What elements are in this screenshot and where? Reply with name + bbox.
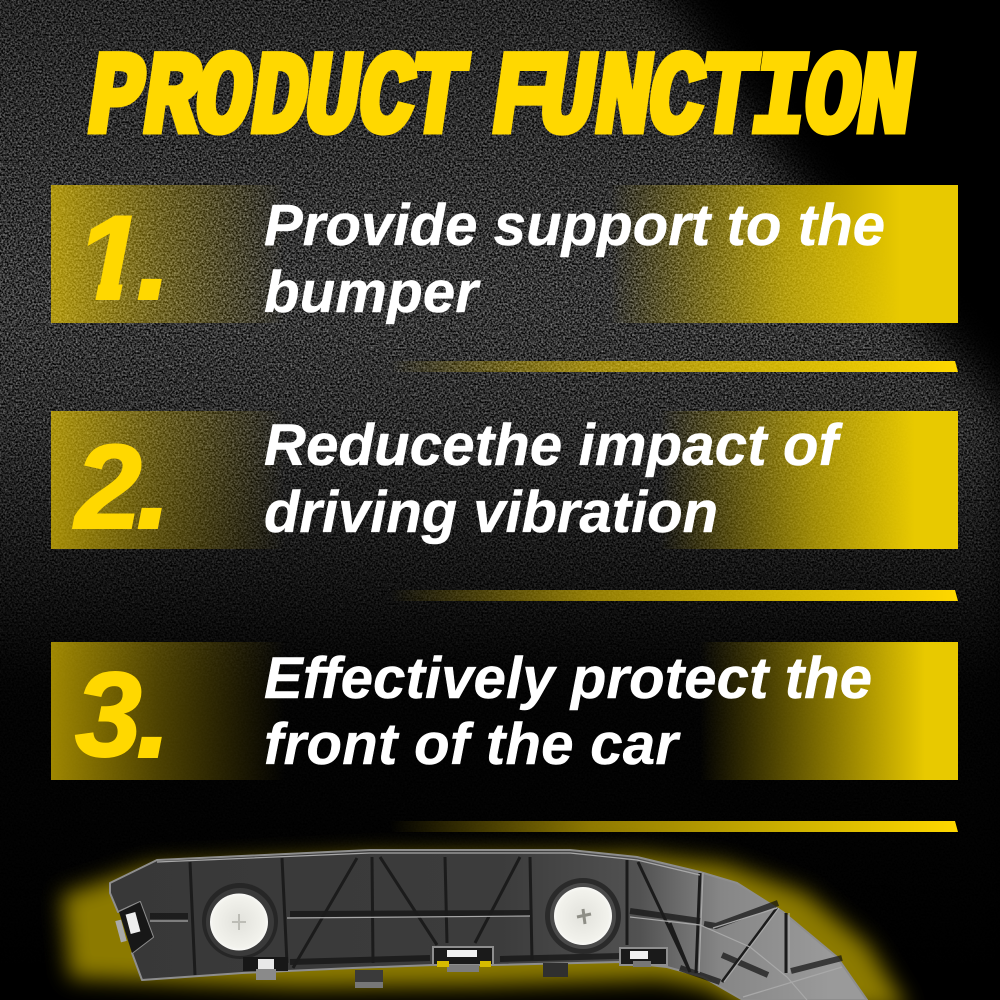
number 3: 3 (75, 648, 142, 782)
accent line 2 (370, 590, 958, 601)
text: reduce impact: Reducethe impact of (264, 413, 844, 478)
bracket body (110, 850, 867, 1000)
text: reduce impact: driving vibration (264, 480, 718, 545)
text: provide support: Provide support to the (264, 193, 885, 258)
lower tabs (355, 963, 568, 988)
left fastener (202, 883, 278, 959)
panel: function 3 (51, 642, 958, 785)
highlight ribs (150, 853, 842, 1000)
accent line 3 (360, 821, 958, 832)
bumper bracket product (110, 850, 867, 1000)
shadow bands (150, 903, 842, 982)
bottom clip left (243, 957, 288, 980)
number 2: 2 (73, 420, 142, 554)
text: provide support (264, 193, 885, 325)
number 1: 1 (76, 191, 143, 325)
number 1 dot: . (136, 184, 172, 327)
panel: function 2 (51, 411, 958, 556)
dark ribs (190, 857, 786, 982)
yellow glow behind bracket (62, 854, 908, 1000)
bottom clip right (620, 948, 667, 967)
text: protect front: Effectively protect the (264, 646, 872, 711)
left edge clip (115, 902, 153, 953)
number 3 dot: . (136, 642, 172, 785)
text: protect front (264, 646, 872, 777)
number 2 dot: . (136, 413, 172, 556)
panel: function 1 (51, 184, 958, 327)
right fastener (545, 878, 621, 954)
accent line 1 (390, 361, 958, 372)
text: provide support: bumper (264, 260, 481, 325)
text: protect front: front of the car (264, 712, 681, 777)
speckled grey background texture (0, 0, 1000, 716)
title: PRODUCT FUNCTION (80, 34, 922, 166)
bottom clip centre (433, 947, 493, 972)
text: reduce impact (264, 413, 844, 545)
